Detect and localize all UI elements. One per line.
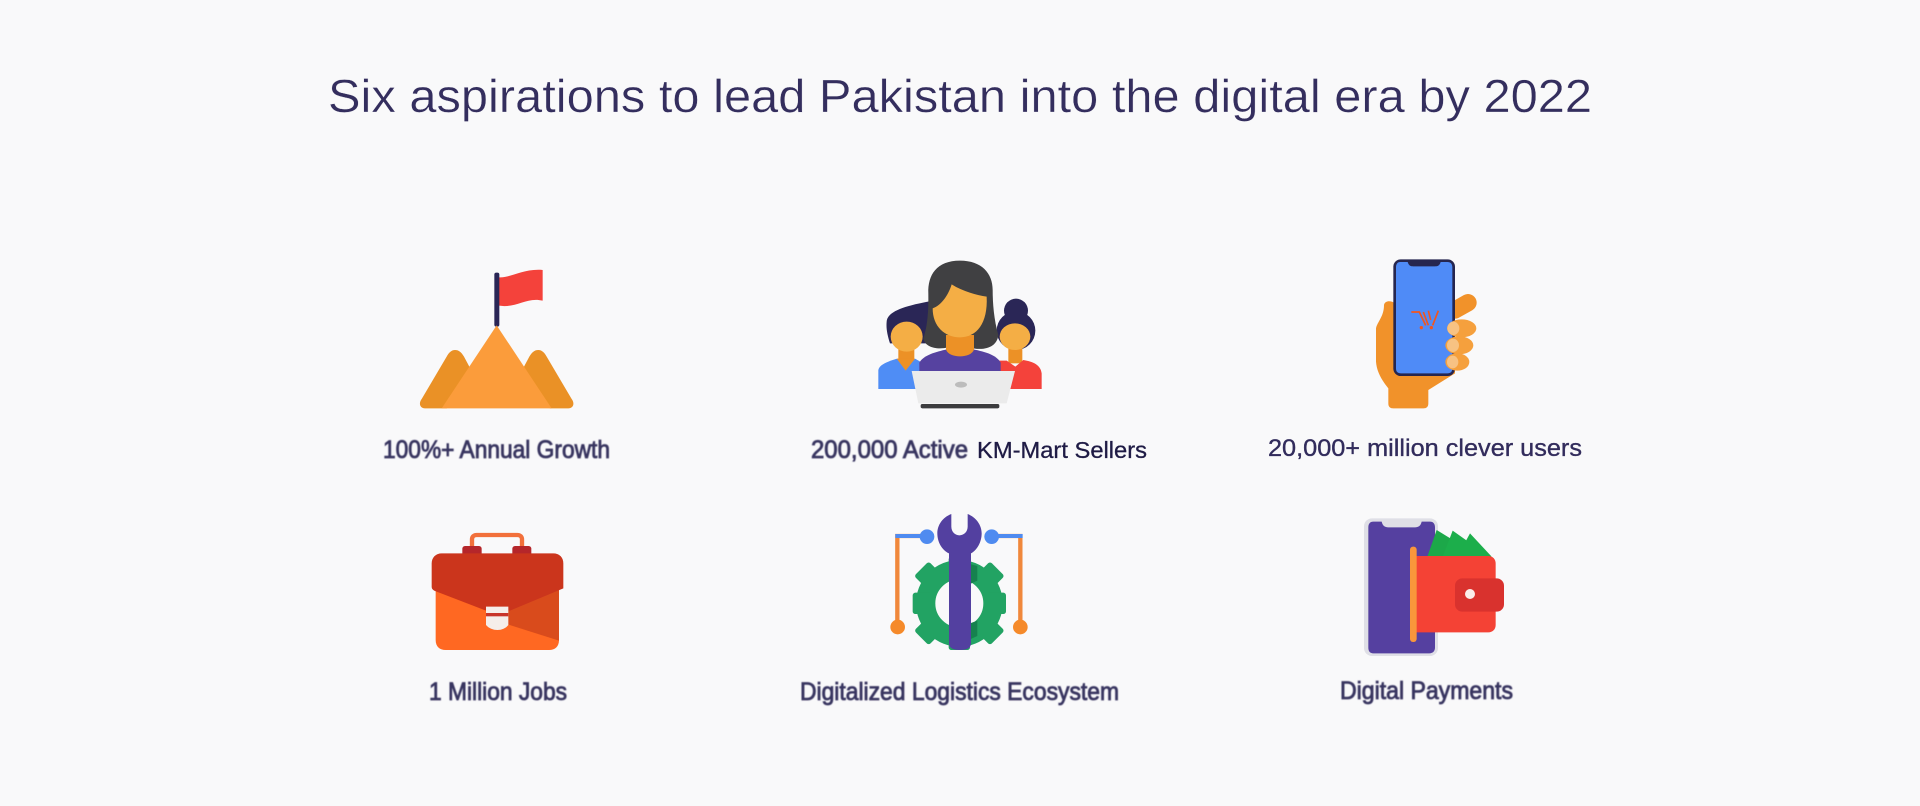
icon: mountain with flag: [420, 270, 573, 408]
label: 200,000 Active KM-Mart Sellers: [811, 436, 1147, 464]
icon: hand holding phone: [1376, 259, 1476, 408]
label: 1 Million Jobs: 1 Million Jobs: [429, 678, 567, 706]
icon: briefcase: [432, 535, 563, 650]
label part: KM-Mart Sellers: KM-Mart Sellers: [977, 437, 1147, 463]
label part: 200,000 Active: 200,000 Active: [811, 436, 968, 464]
icon: sellers group with laptop: [878, 261, 1042, 408]
icon: phone with wallet: [1364, 518, 1504, 656]
label: 100%+ Annual Growth: 100%+ Annual Growth: [383, 436, 610, 464]
label: 20,000+ million clever users: 20,000+ million clever users: [1268, 435, 1582, 462]
title: Six aspirations to lead Pakistan into the digital era by 2022: [328, 70, 1592, 122]
icon: gear and wrench ecosystem: [890, 514, 1028, 650]
label: Digitalized Logistics Ecosystem: Digitalized Logistics Ecosystem: [800, 678, 1119, 706]
label: Digital Payments: Digital Payments: [1340, 677, 1513, 705]
